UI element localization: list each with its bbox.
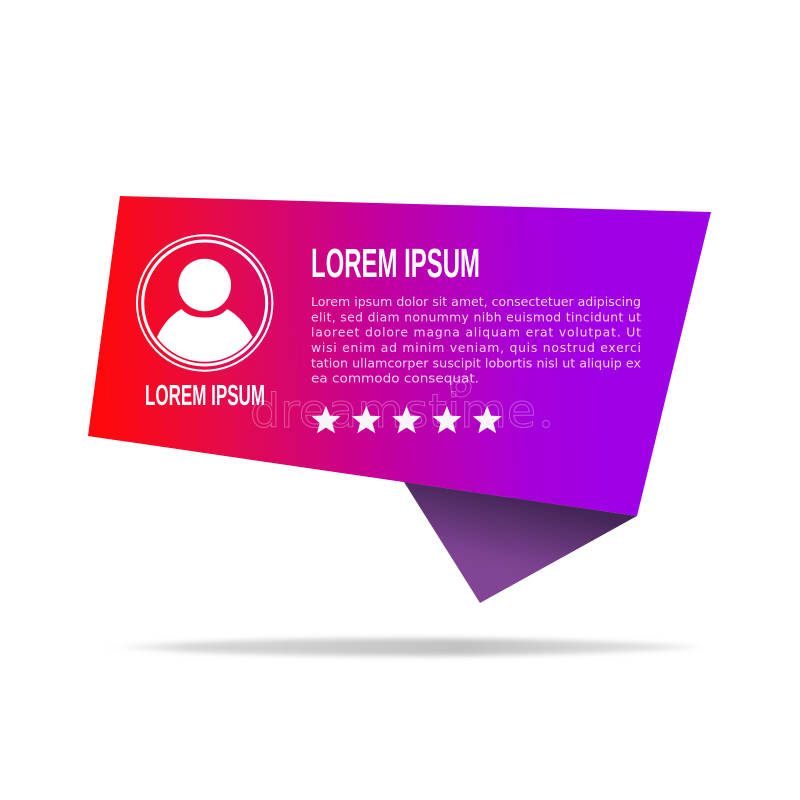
body text: laoreet dolore magna aliquam erat volutpat. Ut bbox=[311, 325, 641, 340]
person body bbox=[157, 309, 252, 362]
body text: elit, sed diam nonummy nibh euismod tincidunt ut bbox=[311, 309, 641, 324]
watermark: dreamstime bbox=[250, 384, 536, 438]
star rating bbox=[312, 406, 502, 433]
body text bbox=[311, 294, 641, 386]
folded tail bbox=[404, 482, 637, 603]
inner ring bbox=[143, 241, 267, 365]
heading: LOREM IPSUM bbox=[311, 240, 480, 286]
ground shadow bbox=[105, 638, 704, 656]
banner panel bbox=[88, 196, 711, 516]
body text: wisi enim ad minim veniam, quis nostrud exerci bbox=[311, 340, 641, 355]
body text: tation ullamcorper suscipit lobortis nisl ut aliquip ex bbox=[311, 355, 641, 370]
avatar badge bbox=[137, 235, 272, 372]
body text: ea commodo consequat. bbox=[311, 371, 479, 386]
badge label: LOREM IPSUM bbox=[145, 380, 265, 412]
outer ring bbox=[137, 235, 272, 371]
body text: Lorem ipsum dolor sit amet, consectetuer adipiscing bbox=[311, 294, 641, 309]
person head bbox=[178, 259, 231, 311]
